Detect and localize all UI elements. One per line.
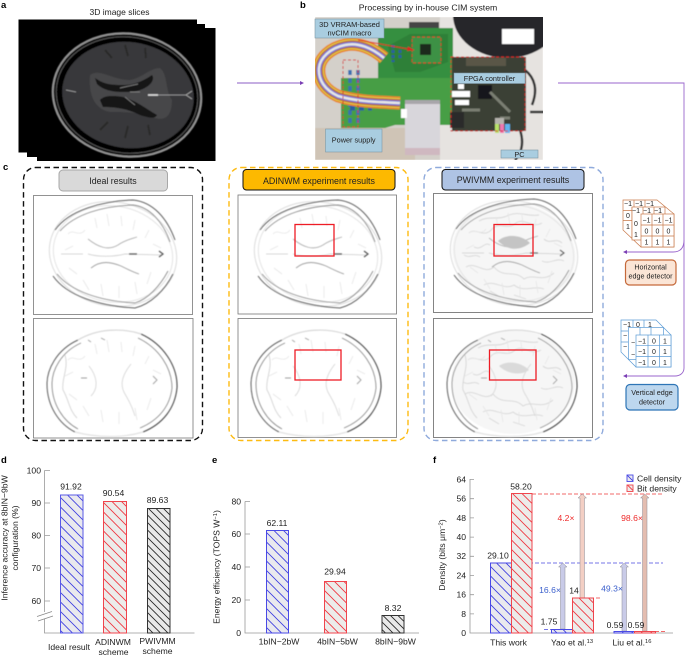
icon: vertical edge detector matrices: −1 [638, 360, 646, 367]
y axis title [0, 474, 20, 601]
image: vertical edge ideal [34, 318, 193, 438]
bar chart e: energy efficiency [212, 496, 419, 646]
x labels: ADINWM [95, 637, 131, 647]
icon: vertical edge detector matrices: 0 [636, 322, 640, 329]
image: vertical edge PWIVMM [434, 318, 592, 438]
label: FPGA controller: FPGA controller [464, 74, 516, 83]
image stack [18, 20, 216, 166]
panel: ADINWM experiment results [229, 168, 408, 440]
y axis title: −1 [213, 513, 219, 520]
bar: 4bIN-5bW [324, 566, 346, 633]
ratio labels: 98.6× [621, 513, 643, 523]
label: Power supply [326, 129, 382, 152]
icon: vertical edge detector matrices: − [631, 340, 635, 347]
icon: vertical edge detector matrices: − [623, 333, 627, 340]
icon: horizontal edge detector matrices: −1 [643, 208, 651, 215]
y tick labels: 40 [231, 562, 241, 572]
y axis title: Energy efficiency (TOPS W [212, 520, 222, 624]
panel label d: d [1, 455, 7, 466]
axes [245, 502, 419, 633]
x labels: 8bIN−9bW [375, 636, 417, 646]
arrow: a to b [237, 81, 304, 85]
y axis title: ) [437, 519, 447, 522]
axes [470, 479, 673, 633]
x labels: 16 [645, 639, 651, 645]
heading: ADINWM experiment results: ADINWM experiment results [263, 176, 376, 186]
y tick labels [456, 474, 466, 638]
x labels: Liu et al. [613, 638, 645, 648]
y tick labels: 16 [456, 590, 466, 600]
x labels: Ideal result [48, 642, 91, 652]
heading: 3D image slices: 3D image slices [90, 7, 150, 17]
legend [627, 474, 682, 494]
icon: horizontal edge detector matrices: 0 [626, 213, 630, 220]
icon: vertical edge detector matrices: −1 [623, 322, 631, 329]
label: Horizontal edge detector: Horizontal [634, 262, 667, 272]
y tick labels: 60 [31, 596, 41, 606]
panel label a: a [1, 0, 7, 11]
x labels: 13 [587, 639, 593, 645]
label: 3D VRRAM-based nvCIM macro [315, 19, 384, 38]
heading: ADINWM experiment results [243, 170, 395, 190]
bars: Liu et al.: 0.59 [628, 620, 645, 630]
red highlight box [295, 224, 334, 256]
x labels: PWIVMM [139, 636, 176, 646]
x labels [259, 636, 417, 646]
bars: Yao et al. [541, 586, 594, 633]
label: Vertical edge detector: Vertical edge [631, 388, 673, 397]
heading: PWIVMM experiment results: PWIVMM experiment results [457, 175, 570, 185]
x labels [48, 636, 176, 656]
heading: Ideal results: Ideal results [89, 176, 137, 186]
red highlight box [295, 350, 341, 380]
image: horizontal edge ADINWM [238, 192, 396, 316]
icon: vertical edge detector matrices: 0 [652, 338, 656, 346]
photo of CIM system [314, 17, 543, 160]
y axis title: −2 [438, 522, 444, 529]
x labels: Yao et al. [551, 638, 587, 648]
image: vertical edge ADINWM [238, 318, 396, 438]
icon: horizontal edge detector matrices: 0 [645, 228, 649, 236]
bar: Ideal result: 91.92 [60, 482, 82, 492]
icon: horizontal edge detector matrices: −1 [643, 218, 651, 224]
bar: 8bIN-9bW [382, 603, 404, 633]
bars: This work: 29.10 [487, 550, 509, 560]
icon: vertical edge detector matrices: −1 [638, 338, 646, 346]
heading: Ideal results [59, 170, 168, 191]
x labels: scheme [142, 646, 173, 656]
axes [44, 470, 194, 633]
icon: horizontal edge detector matrices: 1 [626, 224, 630, 231]
y tick labels: 0 [236, 628, 241, 638]
y tick labels: 56 [456, 494, 466, 504]
white masks [502, 29, 534, 44]
label: FPGA controller [454, 73, 525, 84]
y tick labels: 24 [456, 570, 466, 580]
icon: vertical edge detector matrices [621, 320, 671, 367]
bar: ADINWM scheme: 90.54 [103, 488, 124, 498]
bars: This work: 58.20 [510, 482, 532, 492]
label: 3D VRRAM-based nvCIM macro: nvCIM macro [328, 28, 371, 38]
legend: Bit density [637, 484, 677, 494]
label: Vertical edge detector [626, 384, 678, 410]
arrow: b to detectors [558, 83, 684, 378]
red highlight box [494, 224, 533, 256]
bar: 1bIN-2bW [266, 518, 288, 633]
circuit boards [340, 77, 453, 128]
y axis title: Density (bits μm [437, 529, 447, 591]
icon: vertical edge detector matrices: 0 [652, 349, 656, 356]
bars: Liu et al. [607, 620, 656, 633]
bar: PWIVMM scheme [147, 495, 170, 633]
bar chart f: density [437, 474, 682, 648]
icon: horizontal edge detector matrices: 1 [634, 232, 638, 239]
y tick labels: 80 [31, 530, 41, 540]
label: 3D VRRAM-based nvCIM macro: 3D VRRAM-based [319, 20, 380, 29]
icon: vertical edge detector matrices: 1 [648, 322, 652, 329]
ratio labels: 49.3× [601, 584, 623, 594]
panel: PWIVMM experiment results [424, 168, 603, 440]
icon: horizontal edge detector matrices: −1 [654, 208, 662, 215]
icon: vertical edge detector matrices: − [623, 344, 627, 351]
y tick labels: 8 [461, 609, 466, 619]
icon: vertical edge detector matrices: 1 [663, 349, 667, 356]
label: Horizontal edge detector [626, 260, 676, 285]
panel b: in-house CIM system [315, 0, 561, 160]
ratio labels: 4.2× [558, 513, 574, 523]
bar: PWIVMM scheme: 89.63 [147, 495, 168, 505]
icon: horizontal edge detector matrices: −1 [624, 201, 632, 208]
label: Vertical edge detector: detector [639, 398, 666, 406]
icon: horizontal edge detector matrices: −1 [665, 218, 673, 224]
icon: horizontal edge detector matrices: 0 [634, 221, 638, 228]
bar: 8bIN-9bW: 8.32 [385, 603, 402, 613]
icon: vertical edge detector matrices: − [631, 352, 635, 359]
icon: horizontal edge detector matrices: −1 [646, 201, 654, 208]
ratio labels [539, 513, 643, 595]
icon: horizontal edge detector matrices: 1 [656, 240, 660, 246]
legend: Cell density [637, 474, 682, 484]
bar chart d: inference accuracy [0, 466, 194, 656]
x labels: 4bIN−5bW [317, 636, 359, 646]
y tick labels: 40 [456, 532, 466, 542]
label: PC [501, 150, 538, 159]
label: Power supply: Power supply [332, 136, 376, 144]
panel: Ideal results [24, 168, 202, 440]
icon: horizontal edge detector matrices: 0 [656, 228, 660, 236]
icon: horizontal edge detector matrices: −1 [635, 201, 643, 208]
y tick labels: 32 [456, 551, 466, 561]
y tick labels: 48 [456, 513, 466, 523]
y tick labels: 70 [31, 563, 41, 573]
y tick labels: 80 [231, 496, 241, 506]
red highlight box [490, 350, 536, 380]
icon: vertical edge detector matrices: −1 [638, 349, 646, 356]
y tick labels: 60 [231, 529, 241, 539]
y axis title: configuration (%) [10, 505, 20, 570]
y tick labels [27, 466, 41, 606]
reference dashed lines [511, 494, 666, 632]
heading: PWIVMM experiment results [442, 170, 584, 190]
y tick labels [231, 496, 241, 638]
x labels: This work [490, 638, 528, 648]
icon: horizontal edge detector matrices [623, 200, 674, 247]
panel label b: b [300, 0, 306, 11]
label: PC: PC [514, 150, 525, 159]
icon: vertical edge detector matrices: 1 [663, 338, 667, 346]
bars: Liu et al.: 0.59 [607, 620, 624, 630]
image: horizontal edge ideal [34, 192, 192, 316]
heading: Processing by in-house CIM system: Processing by in-house CIM system [359, 2, 497, 12]
ratio labels: 16.6× [539, 585, 561, 595]
red dashed highlights [343, 37, 525, 131]
bar: Ideal result [60, 482, 83, 633]
y tick labels: 100 [27, 466, 41, 476]
bar: 4bIN-5bW: 29.94 [324, 566, 346, 576]
x labels: 1bIN−2bW [259, 636, 300, 646]
panel a: 3D image slices [18, 7, 216, 166]
bars: Yao et al.: 1.75 [541, 616, 558, 626]
bar: ADINWM scheme [103, 488, 126, 633]
panel label c: c [3, 162, 8, 173]
bars: This work [487, 482, 532, 633]
brain scan [45, 24, 209, 166]
improvement arrows [558, 494, 649, 631]
label: Horizontal edge detector: edge detector [629, 272, 673, 280]
y tick labels: 64 [456, 474, 466, 484]
panel label f: f [433, 455, 437, 466]
y axis title: ) [212, 510, 222, 513]
bars: Yao et al.: 14 [569, 586, 579, 596]
icon: horizontal edge detector matrices: 1 [667, 240, 671, 246]
icon: vertical edge detector matrices: 0 [652, 360, 656, 367]
bar: 1bIN-2bW: 62.11 [267, 518, 288, 528]
x labels [490, 638, 651, 648]
icon: horizontal edge detector matrices: −1 [632, 208, 640, 215]
icon: vertical edge detector matrices: 1 [663, 360, 667, 367]
icon: horizontal edge detector matrices: 1 [645, 240, 649, 246]
y tick labels: 90 [31, 498, 41, 508]
icon: horizontal edge detector matrices: −1 [654, 218, 662, 224]
y tick labels: 20 [231, 595, 241, 605]
panel label e: e [212, 455, 217, 466]
icon: horizontal edge detector matrices: 0 [667, 228, 671, 236]
ribbon cables [319, 44, 400, 103]
image: horizontal edge PWIVMM [434, 191, 592, 315]
y tick labels: 0 [461, 628, 466, 638]
